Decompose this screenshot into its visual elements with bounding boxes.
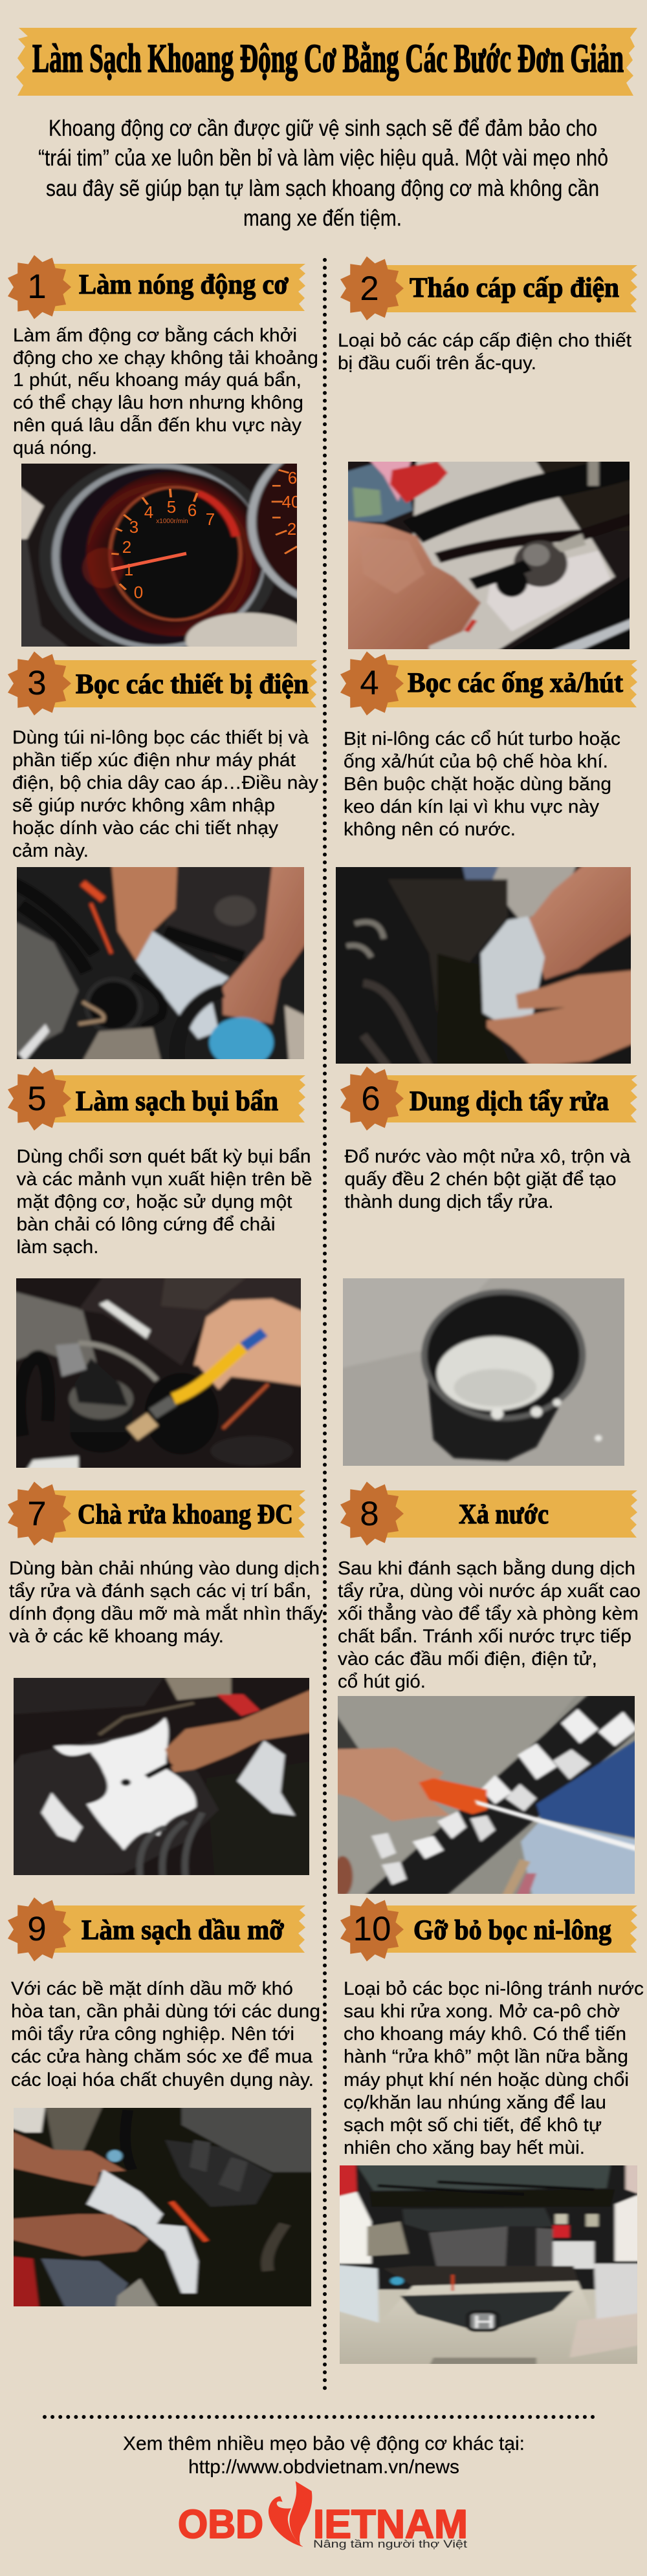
body text 10: cọ/khăn lau nhúng xăng để lau — [344, 2092, 606, 2113]
number badge 1 — [8, 255, 71, 319]
photo: tachometer — [21, 464, 297, 647]
panel: step 1 — [8, 255, 317, 647]
photo: brushing dust — [8, 1272, 305, 1471]
body text 4 — [344, 729, 620, 840]
needle — [111, 553, 186, 570]
body text 5: bàn chải có lông cứng để chải — [17, 1214, 276, 1235]
gauge numerals: 7 — [206, 510, 215, 529]
gauge numerals: 1 — [124, 560, 133, 579]
panel: step 7 — [4, 1482, 324, 1879]
body text 6: quấy đều 2 chén bột giặt để tạo — [344, 1169, 616, 1190]
body text 2: Loại bỏ các cáp cấp điện cho thiết — [338, 330, 631, 351]
body text 6: thành dung dịch tẩy rửa. — [344, 1192, 554, 1212]
body text 5: mặt động cơ, hoặc sử dụng một — [17, 1192, 292, 1212]
number badge 1: 1 — [27, 268, 47, 306]
gauge numerals: 40 — [282, 492, 300, 511]
body text 9: hòa tan, cần phải dùng tới các dung — [11, 2001, 320, 2022]
panel: step 8 — [332, 1482, 641, 1896]
body text 10: Loại bỏ các bọc ni-lông tránh nước — [344, 1979, 644, 1999]
body text 1: quá nóng. — [13, 438, 97, 458]
body text 3: hoặc dính vào các chi tiết nhạy — [12, 818, 279, 839]
number badge 10 — [340, 1897, 404, 1962]
body text 9 — [11, 1979, 320, 2090]
gauge numerals: 2 — [122, 537, 131, 557]
body text 10: sau khi rửa xong. Mở ca-pô chờ — [344, 2001, 620, 2022]
ribbon heading 4 — [378, 660, 637, 707]
body text 2 — [338, 330, 631, 374]
number badge 9 — [8, 1897, 71, 1962]
body text 1 — [13, 325, 318, 458]
ribbon heading 10 — [378, 1905, 637, 1953]
number badge 4 — [340, 652, 404, 715]
intro text — [38, 116, 608, 231]
number badge 8: 8 — [360, 1495, 379, 1533]
number badge 6: 6 — [361, 1080, 380, 1118]
number badge 9: 9 — [27, 1910, 47, 1948]
body text 1: có thể chạy lâu hơn nhưng không — [13, 392, 303, 413]
number badge 6 — [340, 1067, 404, 1130]
ribbon heading 8 — [378, 1490, 637, 1538]
ribbon heading 6: Dung dịch tẩy rửa — [410, 1086, 609, 1117]
panel: step 6 — [336, 1067, 637, 1468]
body text 3: cảm này. — [12, 841, 89, 861]
body text 6 — [344, 1146, 631, 1212]
vertical dotted divider — [323, 260, 327, 2390]
ribbon heading 8: Xả nước — [459, 1499, 549, 1530]
body text 2: bị đầu cuối trên ắc-quy. — [338, 352, 536, 374]
body text 1: Làm ấm động cơ bằng cách khởi — [13, 325, 297, 346]
logo: OBD Vietnam — [178, 2481, 468, 2550]
ribbon heading 3 — [47, 660, 317, 707]
ribbon heading 5: Làm sạch bụi bẩn — [76, 1086, 278, 1117]
horizontal dotted divider — [45, 2415, 597, 2419]
logo: OBD Vietnam: IETNAM — [313, 2502, 468, 2547]
title banner — [16, 28, 637, 96]
panel: step 5 — [8, 1067, 312, 1471]
body text 4: không nên có nước. — [344, 819, 516, 840]
ribbon heading 9 — [47, 1905, 305, 1953]
ribbon heading 5 — [47, 1075, 305, 1122]
ribbon heading 3: Bọc các thiết bị điện — [76, 669, 309, 700]
photo: scrubbing foam — [4, 1673, 316, 1879]
intro text: mang xe đến tiệm. — [243, 206, 402, 231]
number badge 5 — [8, 1067, 71, 1130]
body text 1: động cho xe chạy không tải khoảng — [13, 348, 318, 369]
body text 7: và ở các kẽ khoang máy. — [9, 1626, 224, 1647]
ribbon heading 2 — [378, 265, 637, 312]
body text 1: 1 phút, nếu khoang máy quá bẩn, — [13, 370, 302, 391]
body text 8: tẩy rửa, dùng vòi nước áp xuất cao — [338, 1581, 641, 1602]
panel: step 3 — [8, 652, 319, 1068]
footer text: http://www.obdvietnam.vn/news — [188, 2456, 459, 2478]
body text 8: vào các đầu mối điện, điện tử, — [338, 1649, 597, 1669]
body text 8: cổ hút gió. — [338, 1671, 426, 1692]
body text 8: Sau khi đánh sạch bằng dung dịch — [338, 1558, 635, 1579]
ribbon heading 9: Làm sạch dầu mỡ — [82, 1915, 284, 1946]
body text 3: sẽ giúp nước không xâm nhập — [12, 795, 275, 816]
ribbon heading 1 — [47, 264, 305, 311]
body text 4: ống xả/hút của bộ chế hòa khí. — [344, 751, 608, 772]
body text 3: Dùng túi ni-lông bọc các thiết bị và — [12, 727, 309, 748]
body text 5: và các mảnh vụn xuất hiện trên bề — [17, 1169, 312, 1190]
body text 10 — [344, 1979, 644, 2158]
body text 5: làm sạch. — [17, 1237, 98, 1258]
body text 5: Dùng chổi sơn quét bất kỳ bụi bẩn — [17, 1146, 311, 1167]
body text 9: môi tẩy rửa công nghiệp. Nên tới — [11, 2024, 294, 2045]
logo: OBD Vietnam: Nâng tầm người thợ Việt — [313, 2538, 467, 2550]
body text 10: hành “rửa khô” một lần nữa bằng — [344, 2046, 628, 2067]
body text 7: dính đọng dầu mỡ mà mắt nhìn thấy — [9, 1603, 324, 1624]
body text 7 — [9, 1558, 324, 1647]
ribbon heading 1: Làm nóng động cơ — [79, 270, 289, 300]
body text 7: tẩy rửa và đánh sạch các vị trí bẩn, — [9, 1581, 311, 1602]
number badge 10: 10 — [353, 1910, 391, 1948]
body text 9: các loại hóa chất chuyên dụng này. — [11, 2070, 314, 2090]
body text 4: Bên buộc chặt hoặc dùng băng — [344, 774, 611, 795]
logo: OBD Vietnam: OBD — [178, 2502, 263, 2547]
body text 10: cho khoang máy khô. Có thể tiến — [344, 2024, 626, 2045]
photo: degreasing with bag — [6, 2104, 316, 2311]
ribbon heading 2: Tháo cáp cấp điện — [410, 273, 619, 303]
gauge numerals: 4 — [144, 502, 153, 522]
body text 5 — [17, 1146, 312, 1258]
gauge numerals: 6 — [188, 500, 197, 520]
photo: wrapping electrics — [17, 867, 304, 1059]
gauge numerals: 2 — [287, 519, 296, 539]
gauge numerals: 5 — [167, 497, 176, 517]
number badge 2: 2 — [360, 270, 379, 308]
number badge 7: 7 — [27, 1495, 47, 1533]
body text 6: Đổ nước vào một nửa xô, trộn và — [344, 1146, 631, 1167]
photo: finished engine bay — [332, 2161, 644, 2368]
gauge numerals: 3 — [129, 517, 138, 537]
gauge numerals — [122, 468, 300, 602]
number badge 3 — [8, 652, 71, 715]
gauge numerals: x1000r/min — [156, 518, 188, 525]
body text 8: xối thẳng vào để tẩy xà phòng kèm — [338, 1602, 639, 1624]
panel: step 9 — [6, 1897, 320, 2311]
body text 4: Bịt ni-lông các cổ hút turbo hoặc — [344, 729, 620, 749]
number badge 4: 4 — [360, 664, 379, 702]
ribbon heading 4: Bọc các ống xả/hút — [408, 668, 624, 698]
ribbon heading 6 — [378, 1075, 637, 1122]
footer text — [123, 2433, 525, 2478]
panel: step 4 — [326, 652, 640, 1069]
body text 3 — [12, 727, 319, 861]
body text 10: máy phụt khí nén hoặc dùng chổi — [344, 2070, 629, 2090]
ribbon heading 7 — [47, 1490, 305, 1538]
number badge 2 — [340, 256, 404, 321]
gauge numerals: 0 — [134, 583, 143, 602]
body text 9: các cửa hàng chăm sóc xe để mua — [11, 2046, 313, 2067]
gauge numerals: 6 — [288, 468, 297, 488]
photo: pressure washing — [332, 1693, 640, 1896]
ribbon heading 7: Chà rửa khoang ĐC — [78, 1499, 293, 1530]
body text 10: nhiên cho xăng bay hết mùi. — [344, 2138, 585, 2158]
body text 3: điện, bộ chia dây cao áp…Điều này — [12, 773, 319, 793]
body text 8 — [338, 1558, 641, 1692]
number badge 3: 3 — [27, 664, 47, 702]
body text 1: nên quá lâu dẫn đến khu vực này — [13, 414, 302, 436]
body text 9: Với các bề mặt dính dầu mỡ khó — [11, 1979, 293, 1999]
photo: battery cable — [348, 462, 630, 649]
body text 4: keo dán kín lại vì khu vực này — [344, 797, 600, 817]
footer text: Xem thêm nhiều mẹo bảo vệ động cơ khác tại: — [123, 2433, 525, 2454]
panel: step 10 — [332, 1897, 644, 2368]
number badge 7 — [8, 1482, 71, 1545]
number badge 8 — [340, 1482, 404, 1545]
photo: sealing intake — [336, 867, 631, 1064]
ribbon heading 10: Gỡ bỏ bọc ni-lông — [413, 1915, 611, 1946]
body text 10: sạch một số chi tiết, để khô tự — [344, 2115, 602, 2136]
icon: flame V — [269, 2481, 312, 2547]
photo: bucket of detergent — [336, 1272, 627, 1468]
panel: step 2 — [338, 256, 640, 654]
body text 8: chất bẩn. Tránh xối nước trực tiếp — [338, 1626, 631, 1647]
body text 3: phần tiếp xúc điện như máy phát — [12, 750, 296, 771]
body text 7: Dùng bàn chải nhúng vào dung dịch — [9, 1558, 320, 1579]
number badge 5: 5 — [27, 1080, 47, 1118]
